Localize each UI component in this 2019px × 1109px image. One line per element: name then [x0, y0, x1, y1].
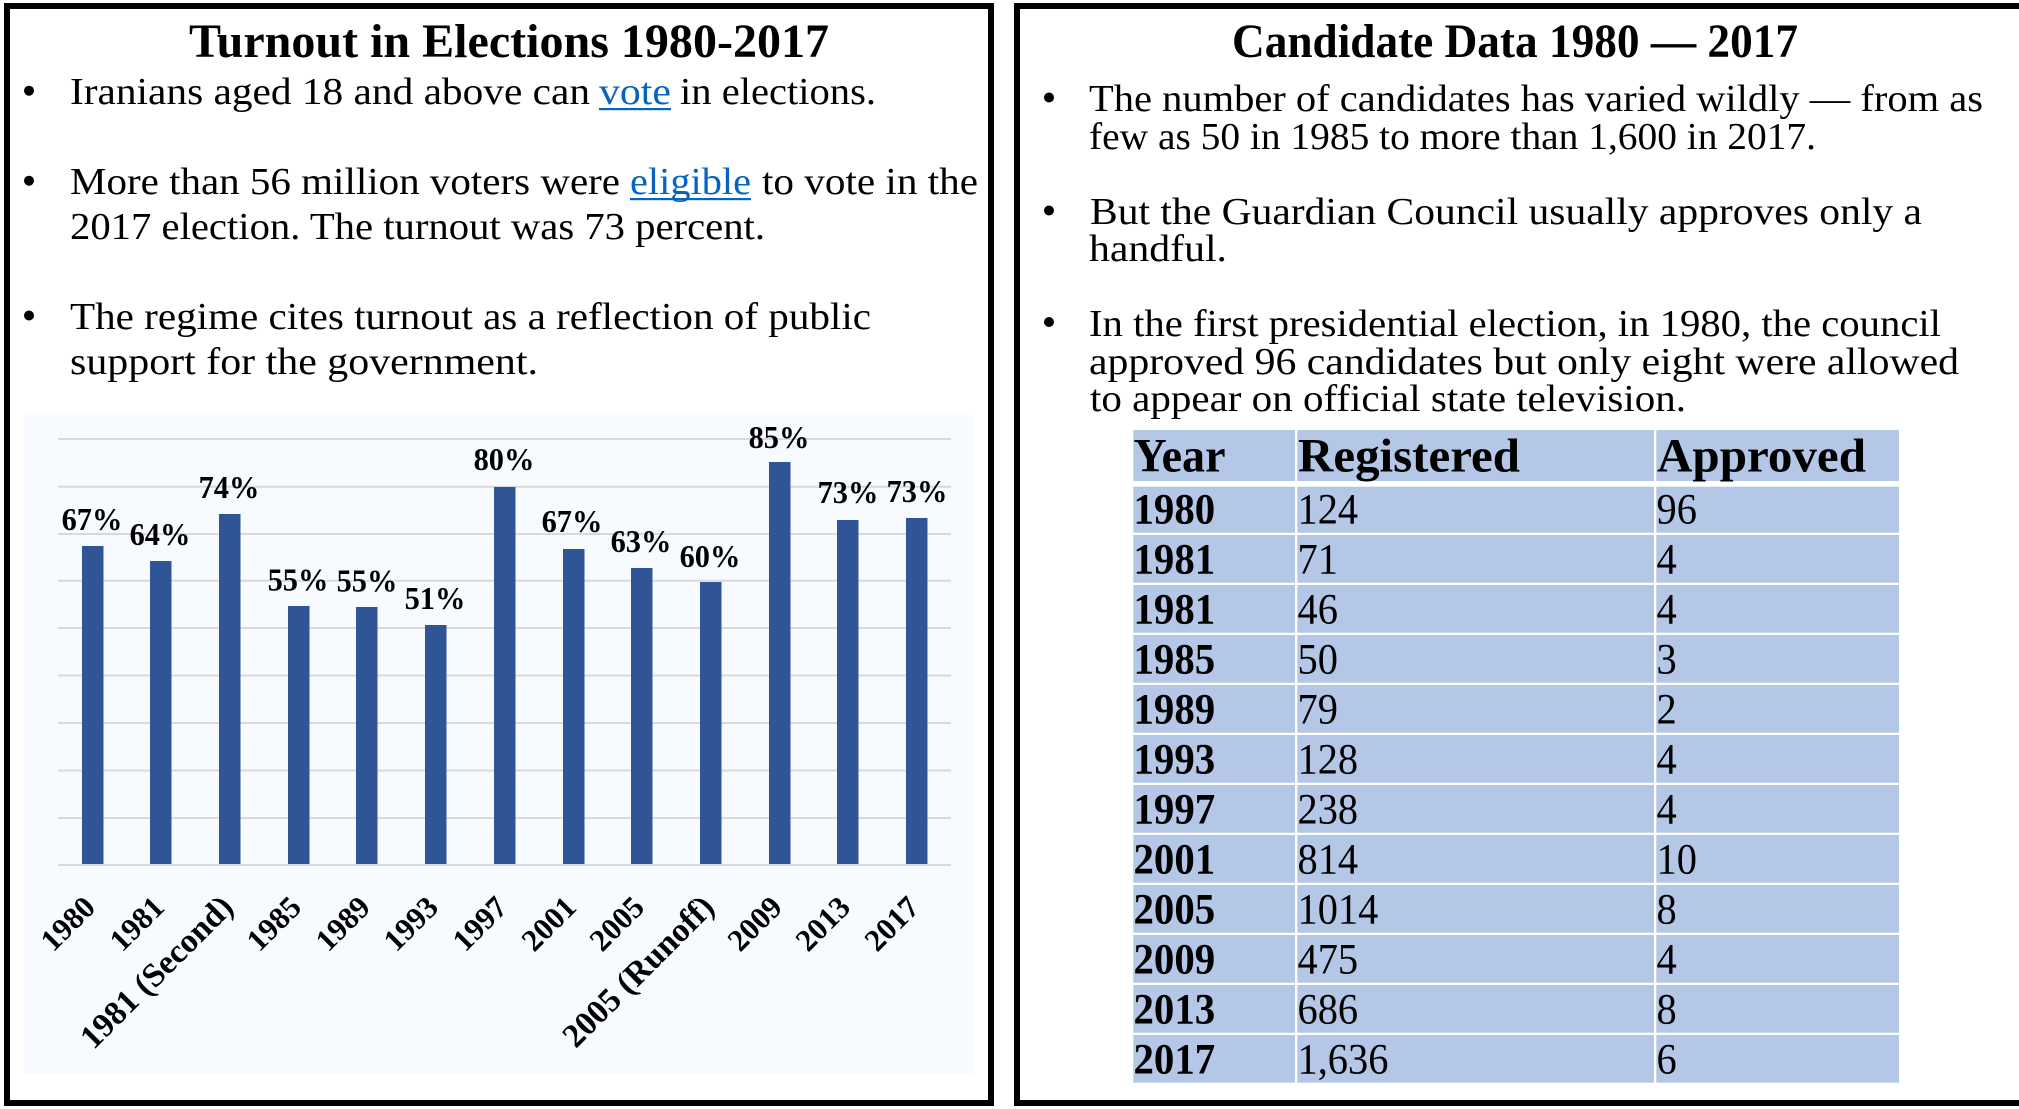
table rows: 1997	[1134, 786, 1215, 834]
value labels: 67%	[62, 501, 122, 537]
table rows: 2001	[1134, 836, 1215, 884]
table rows: 1,636	[1297, 1036, 1388, 1084]
table rows: 50	[1297, 636, 1338, 684]
table rows: 6	[1657, 1036, 1677, 1084]
value labels	[62, 419, 947, 616]
bullet: regime cites turnout: support for the government.	[70, 341, 538, 383]
value labels: 73%	[887, 473, 947, 509]
table rows: 8	[1657, 886, 1677, 934]
panel border	[7, 6, 991, 1103]
bullet: first election: to appear on official state television.	[1090, 378, 1686, 420]
value labels: 63%	[611, 523, 671, 559]
table rows: 1993	[1134, 736, 1215, 784]
category axis labels: 2017	[857, 889, 926, 958]
bullet: voting age: in elections.	[680, 71, 876, 113]
table rows	[1134, 486, 1697, 1084]
value labels: 64%	[130, 516, 190, 552]
heading: candidate data: Candidate Data 1980 — 2017	[1232, 15, 1798, 68]
value labels: 60%	[680, 538, 740, 574]
category axis labels: 1980	[33, 889, 102, 958]
value labels: 80%	[474, 441, 534, 477]
table rows: 814	[1297, 836, 1358, 884]
table rows: 124	[1297, 486, 1358, 534]
value labels: 74%	[199, 469, 259, 505]
bullet: guardian council	[1044, 191, 1922, 270]
table rows: 10	[1657, 836, 1697, 884]
table rows: 1989	[1134, 686, 1215, 734]
table rows: 8	[1657, 986, 1677, 1034]
bullet: eligible voters: to vote in the	[762, 161, 978, 203]
bullet: voting age: Iranians aged 18 and above can	[70, 71, 590, 113]
table: registered and approved candidates	[1133, 430, 1899, 1084]
value labels: 67%	[542, 503, 602, 539]
panel: candidate data	[1017, 6, 2019, 1103]
heading: turnout: Turnout in Elections 1980-2017	[189, 15, 829, 68]
bullet: number of candidates: The number of candidates has varied wildly — from as	[1089, 78, 1983, 120]
table rows: 96	[1657, 486, 1697, 534]
table rows: 2013	[1134, 986, 1215, 1034]
table rows: 128	[1297, 736, 1358, 784]
table header: Year	[1134, 430, 1226, 482]
table rows: 4	[1657, 936, 1677, 984]
bullet: regime cites turnout: The regime cites turnout as a reflection of public	[70, 296, 871, 338]
table rows: 2	[1657, 686, 1677, 734]
table rows: 4	[1657, 786, 1677, 834]
bar chart: turnout by year	[24, 415, 974, 1075]
table rows: 4	[1657, 586, 1677, 634]
table rows: 4	[1657, 736, 1677, 784]
bullet: first election	[1044, 303, 1959, 420]
table rows: 4	[1657, 536, 1677, 584]
table rows: 79	[1297, 686, 1338, 734]
table rows: 1980	[1134, 486, 1215, 534]
table rows: 1981	[1134, 536, 1215, 584]
panel: turnout in elections	[7, 6, 991, 1103]
table rows: 1985	[1134, 636, 1215, 684]
table rows: 2009	[1134, 936, 1215, 984]
bars	[82, 462, 928, 864]
bullet: number of candidates	[1044, 78, 1983, 158]
table rows: 475	[1297, 936, 1358, 984]
bullet: voting age: vote	[599, 71, 671, 113]
table header: Registered	[1298, 430, 1520, 482]
category axis labels: 1981	[102, 889, 171, 958]
bullet: number of candidates: few as 50 in 1985 to more than 1,600 in 2017.	[1089, 116, 1816, 158]
table rows: 46	[1297, 586, 1338, 634]
bullet: regime cites turnout	[24, 296, 871, 383]
bullet: voting age	[24, 71, 876, 113]
table rows: 3	[1657, 636, 1677, 684]
table rows: 238	[1297, 786, 1358, 834]
category axis labels: 2005	[582, 889, 651, 958]
value labels: 55%	[268, 562, 328, 598]
bullet: eligible voters: 2017 election. The turnout was 73 percent.	[70, 206, 765, 248]
table rows: 2017	[1134, 1036, 1215, 1084]
bullet: eligible voters: More than 56 million voters were	[70, 161, 620, 203]
table rows: 1014	[1297, 886, 1378, 934]
category axis labels: 2009	[720, 889, 789, 958]
value labels: 51%	[405, 580, 465, 616]
category axis labels: 1993	[376, 889, 445, 958]
table header	[1134, 430, 1866, 482]
category axis labels: 2001	[514, 889, 583, 958]
bullet: guardian council: But the Guardian Council usually approves only a	[1090, 191, 1922, 233]
table rows: 2005	[1134, 886, 1215, 934]
table rows: 71	[1297, 536, 1338, 584]
category axis labels: 2013	[788, 889, 857, 958]
table rows: 686	[1297, 986, 1358, 1034]
value labels: 85%	[749, 419, 809, 455]
bullet: guardian council: handful.	[1089, 228, 1227, 270]
category axis labels: 1989	[308, 889, 377, 958]
category axis labels	[33, 888, 926, 1056]
bullet: eligible voters	[24, 161, 978, 248]
category axis labels: 1997	[445, 889, 514, 958]
bullet: eligible voters: eligible	[630, 161, 751, 203]
category axis labels: 1985	[239, 889, 308, 958]
panel border	[1017, 6, 2019, 1103]
value labels: 73%	[818, 474, 878, 510]
category axis labels: 2005 (Runoff)	[555, 888, 722, 1055]
bullet: first election: approved 96 candidates but only eight were allowed	[1089, 341, 1959, 383]
table header: Approved	[1657, 430, 1866, 482]
value labels: 55%	[337, 563, 397, 599]
category axis labels: 1981 (Second)	[73, 888, 241, 1056]
table rows: 1981	[1134, 586, 1215, 634]
bullet: first election: In the first presidential election, in 1980, the council	[1089, 303, 1941, 345]
